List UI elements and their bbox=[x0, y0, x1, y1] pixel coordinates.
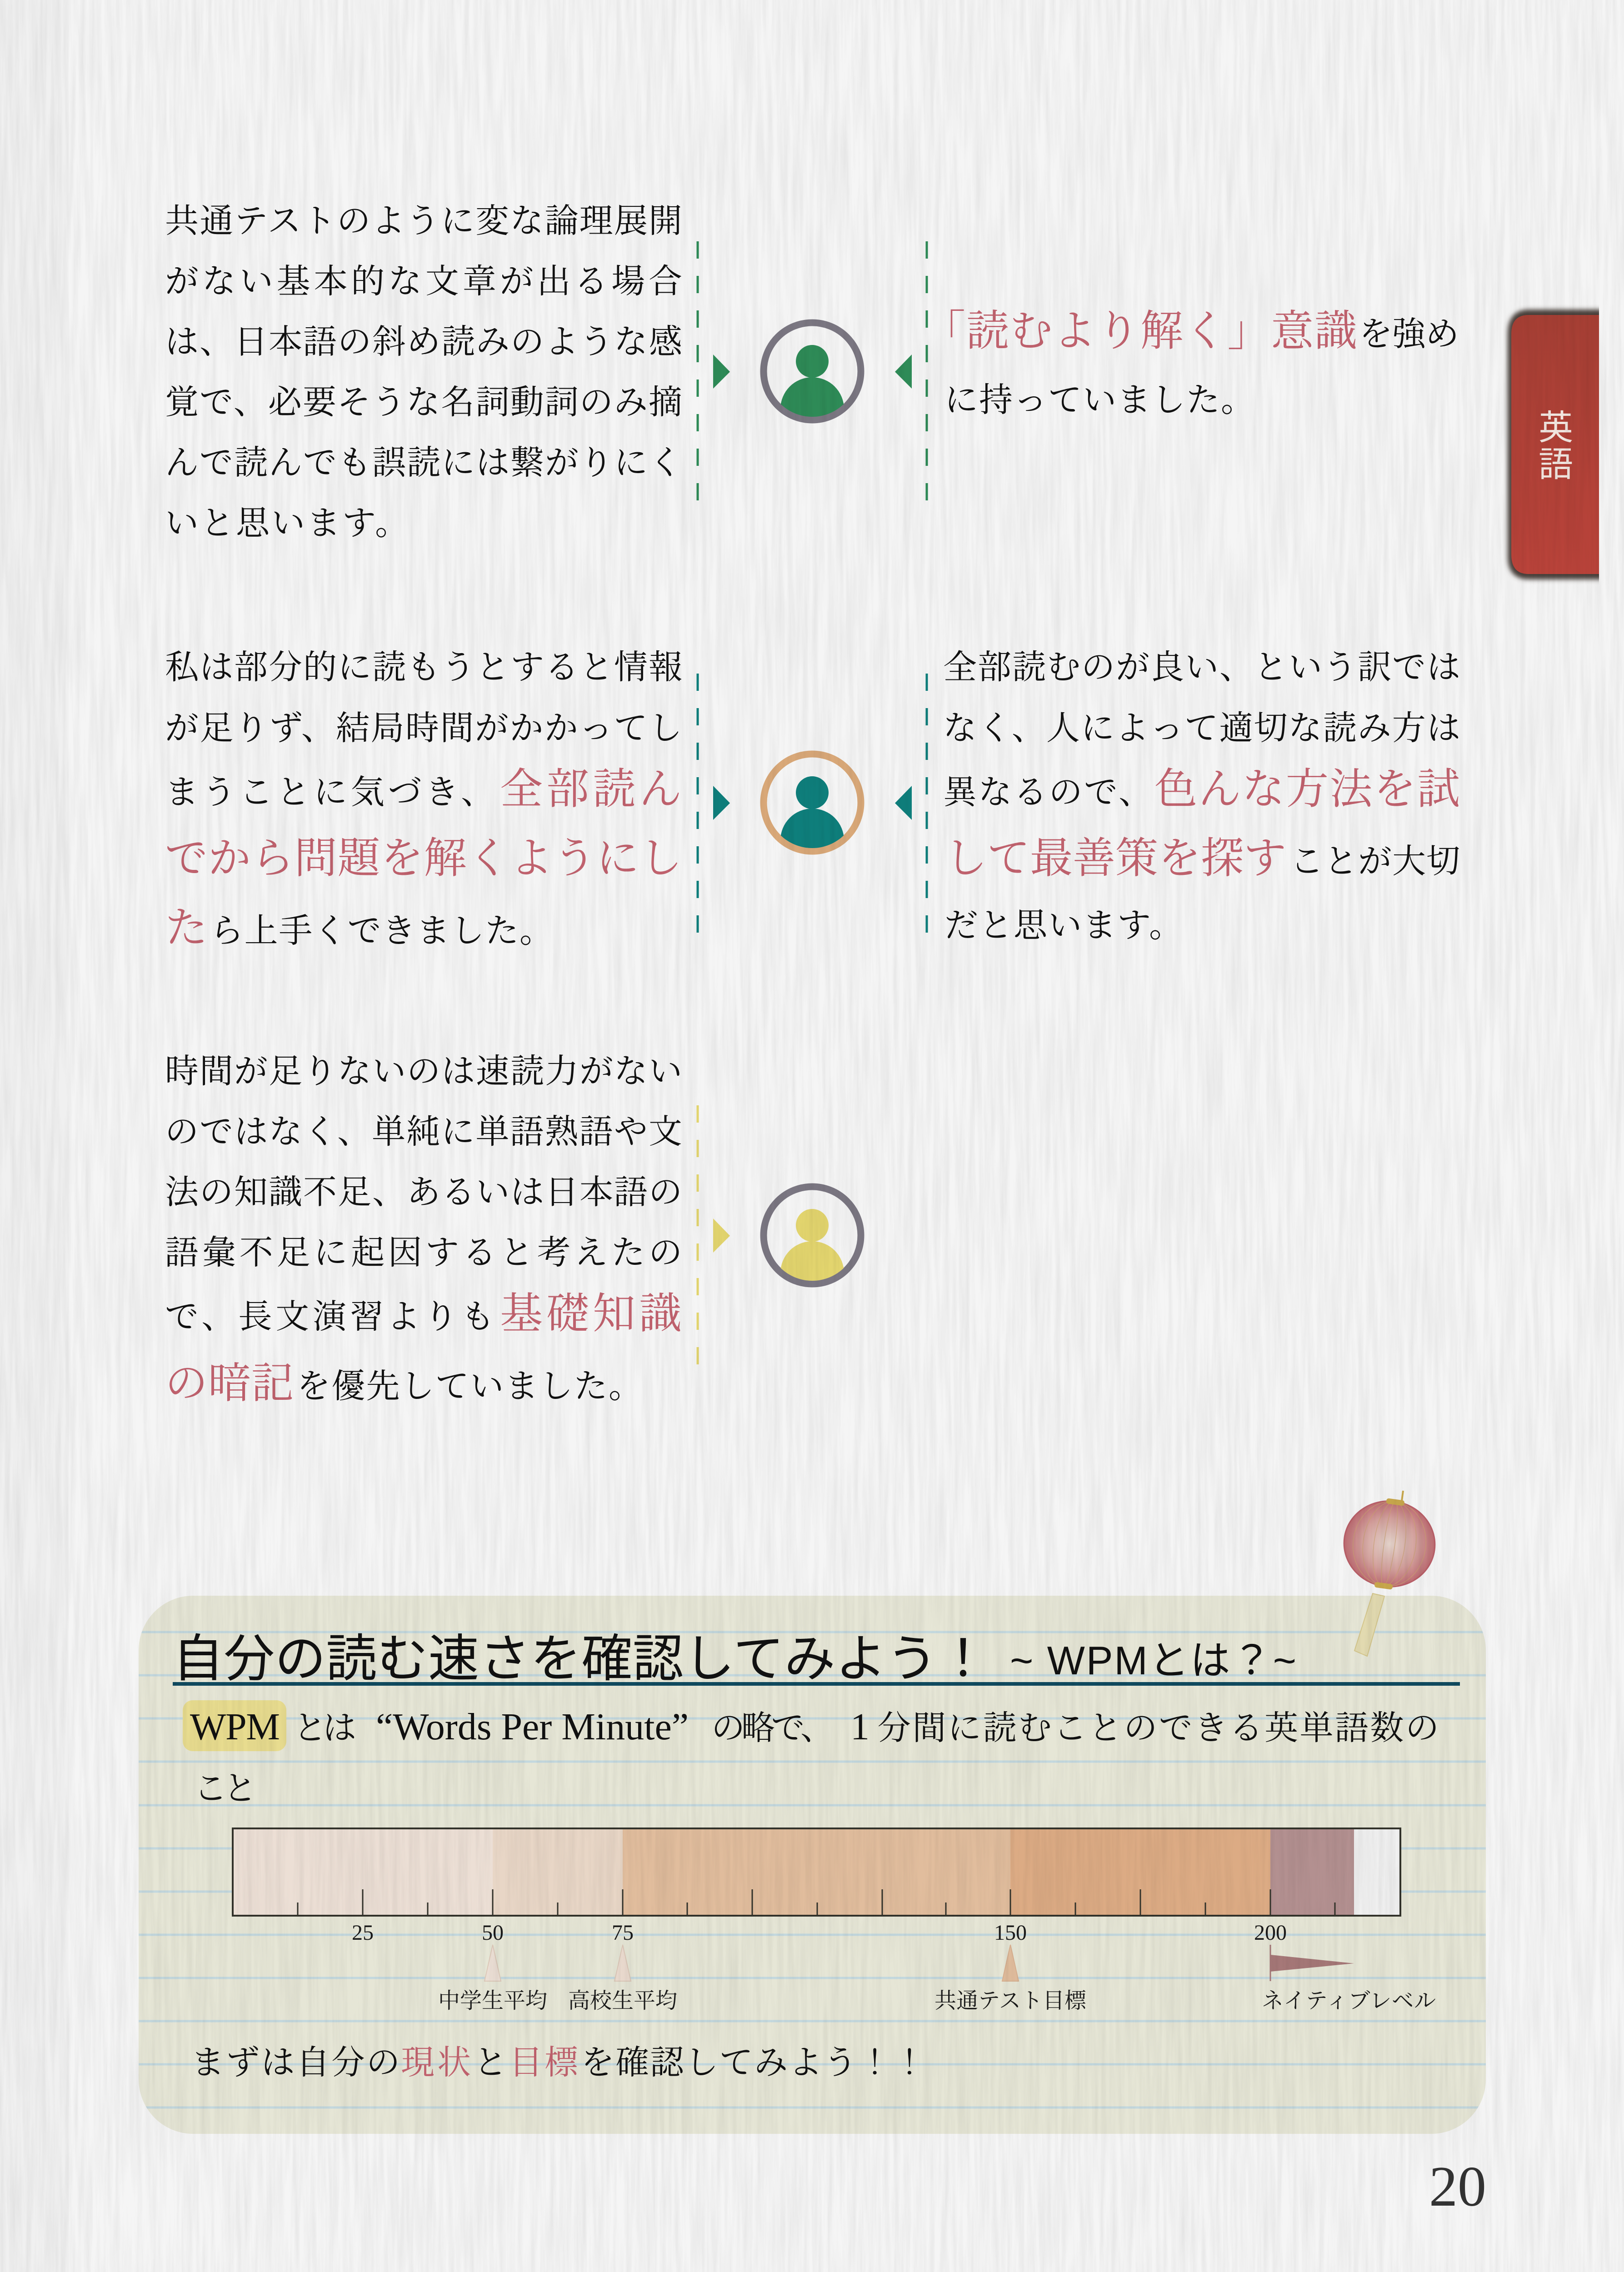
text block: left opinion 1: んで読んでも誤読には繋がりにく bbox=[165, 444, 682, 482]
text block: right opinion 2: 異なるので、 bbox=[943, 774, 1152, 811]
text block: left opinion 1: がない基本的な文章が出る場合 bbox=[165, 263, 682, 300]
text block: left opinion 1: いと思います。 bbox=[165, 505, 410, 542]
text block: right opinion 2: ことが大切 bbox=[1290, 843, 1460, 880]
marker labels bbox=[438, 1989, 1436, 2013]
scale bands bbox=[233, 1828, 1400, 1916]
text block: right opinion 2: なく、人によって適切な読み方は bbox=[943, 710, 1460, 747]
marker labels: 共通テスト目標 bbox=[934, 1989, 1087, 2013]
text block: WPM definition: “Words Per Minute” bbox=[376, 1706, 689, 1748]
arrow: right-pointing teal bbox=[713, 786, 730, 820]
icon: person teal bbox=[764, 754, 861, 872]
text block: right opinion 1: に持っていました。 bbox=[944, 382, 1255, 419]
panel background bbox=[139, 1596, 1486, 2134]
call to action: と bbox=[474, 2044, 507, 2082]
call to action: を確認してみよう！！ bbox=[581, 2044, 926, 2082]
marker labels: ネイティブレベル bbox=[1262, 1989, 1436, 2013]
marker: junior high average bbox=[485, 1945, 501, 1981]
marker: native level flag bbox=[1270, 1945, 1354, 1981]
heading: 自分の読む速さを確認してみよう！ bbox=[173, 1630, 989, 1687]
text block: right opinion 2: 全部読むのが良い、という訳では bbox=[943, 649, 1460, 686]
icon: paper lantern bbox=[1338, 1491, 1441, 1656]
panel: opinion 3 bbox=[165, 1053, 861, 1407]
right dashed divider, green bbox=[925, 241, 928, 501]
text block: left opinion 2: が足りず、結局時間がかかってし bbox=[165, 710, 682, 747]
axis labels: 200 bbox=[1254, 1921, 1287, 1945]
axis labels: 150 bbox=[994, 1921, 1027, 1945]
call to action: 目標 bbox=[509, 2044, 579, 2082]
text block: WPM definition: とは bbox=[293, 1710, 356, 1747]
call to action bbox=[191, 2044, 926, 2082]
text block: WPM definition: 1 bbox=[850, 1706, 869, 1748]
text block: right opinion 2: して最善策を探す bbox=[944, 835, 1286, 882]
left dashed divider, yellow bbox=[696, 1105, 699, 1366]
text block: WPM definition bbox=[190, 1706, 1439, 1808]
text block: left opinion 1: 覚で、必要そうな名詞動詞のみ摘 bbox=[165, 384, 682, 421]
text block: left opinion 2: まうことに気づき、 bbox=[165, 774, 495, 811]
text block: WPM definition: こと bbox=[194, 1770, 257, 1808]
heading: ~ WPMとは？~ bbox=[1010, 1638, 1296, 1683]
text block: WPM definition: WPM bbox=[190, 1706, 280, 1748]
text block: right opinion 1: を強め bbox=[1359, 316, 1459, 353]
marker: common test target bbox=[1002, 1945, 1019, 1981]
text block: left opinion 1 bbox=[165, 203, 683, 542]
tab: subject label bbox=[1508, 310, 1618, 579]
call to action: 現状 bbox=[401, 2044, 471, 2082]
text block: right opinion 2 bbox=[943, 649, 1460, 944]
text block: left opinion 3: の暗記 bbox=[165, 1360, 294, 1407]
text block: left opinion 3: で、長文演習よりも bbox=[165, 1298, 495, 1336]
panel: opinion 2 bbox=[165, 649, 1460, 952]
text block: left opinion 2: ら上手くできました。 bbox=[210, 913, 553, 950]
text block: right opinion 1: 「読むより解く」意識 bbox=[923, 308, 1357, 355]
axis labels: 75 bbox=[612, 1921, 634, 1945]
text block: left opinion 3: のではなく、単純に単語熟語や文 bbox=[165, 1114, 682, 1151]
left dashed divider, green bbox=[696, 241, 699, 501]
text block: left opinion 1: は、日本語の斜め読みのような感 bbox=[165, 324, 683, 361]
heading underline bbox=[173, 1682, 1460, 1686]
text block: left opinion 2: た bbox=[165, 904, 208, 952]
arrow: left-pointing green bbox=[895, 355, 912, 389]
axis labels: 50 bbox=[482, 1921, 504, 1945]
marker labels: 中学生平均 bbox=[438, 1989, 547, 2013]
right dashed divider, teal bbox=[925, 674, 928, 934]
text block: left opinion 2 bbox=[165, 649, 682, 952]
text block: left opinion 3: 基礎知識 bbox=[500, 1290, 682, 1338]
chart: reading speed scale bbox=[233, 1828, 1436, 2013]
text block: left opinion 3: 語彙不足に起因すると考えたの bbox=[165, 1234, 682, 1272]
highlight: WPM bbox=[183, 1700, 286, 1751]
arrow: right-pointing green bbox=[713, 355, 730, 389]
panel: WPM explanation bbox=[139, 1596, 1486, 2134]
text block: left opinion 3 bbox=[165, 1053, 682, 1407]
arrow: left-pointing teal bbox=[895, 786, 912, 820]
text block: WPM definition: の略で、 bbox=[711, 1710, 834, 1747]
text block: left opinion 1: 共通テストのように変な論理展開 bbox=[165, 203, 682, 240]
left dashed divider, teal bbox=[696, 674, 699, 934]
text block: left opinion 3: を優先していました。 bbox=[297, 1368, 642, 1405]
page number: 20 bbox=[1429, 2155, 1486, 2218]
axis labels: 25 bbox=[352, 1921, 374, 1945]
icon: person yellow bbox=[764, 1187, 861, 1305]
tab: subject label: 英 bbox=[1539, 409, 1573, 447]
icon: person green bbox=[764, 323, 861, 441]
text block: left opinion 2: 全部読ん bbox=[500, 766, 682, 813]
text block: left opinion 2: でから問題を解くようにし bbox=[165, 835, 682, 882]
text block: left opinion 3: 法の知識不足、あるいは日本語の bbox=[165, 1174, 682, 1211]
marker labels: 高校生平均 bbox=[568, 1989, 677, 2013]
text block: left opinion 3: 時間が足りないのは速読力がない bbox=[165, 1053, 682, 1090]
arrow: right-pointing yellow bbox=[713, 1218, 730, 1253]
tab: subject label: 語 bbox=[1539, 445, 1573, 484]
axis labels bbox=[352, 1921, 1287, 1945]
text block: right opinion 2: だと思います。 bbox=[944, 907, 1184, 944]
call to action: まずは自分の bbox=[191, 2044, 400, 2082]
panel: opinion 1 bbox=[165, 203, 1459, 542]
text block: right opinion 1 bbox=[923, 308, 1459, 419]
text block: right opinion 2: 色んな方法を試 bbox=[1154, 766, 1460, 813]
text block: left opinion 2: 私は部分的に読もうとすると情報 bbox=[165, 649, 682, 686]
text block: WPM definition: 分間に読むことのできる英単語数の bbox=[877, 1710, 1439, 1747]
marker: high school average bbox=[615, 1945, 631, 1981]
